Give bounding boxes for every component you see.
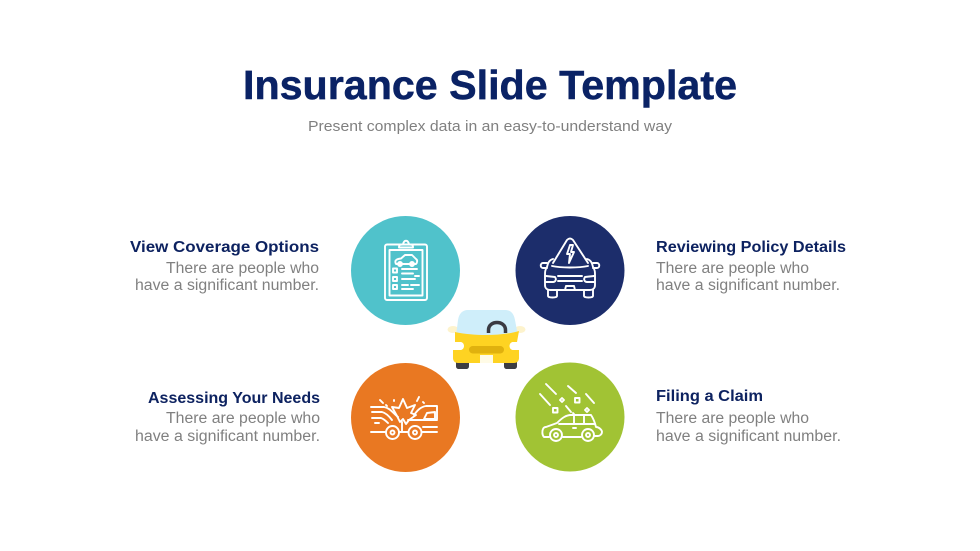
- heading: assessing your needs: Assessing Your Needs: [148, 390, 320, 407]
- panel: reviewing policy details: [656, 239, 846, 294]
- text block: assessing your needs: have a significant number.: [135, 428, 320, 445]
- icon: car crash: [371, 397, 437, 439]
- text block: reviewing policy details: There are people who: [656, 260, 809, 277]
- teal circle with clipboard icon: [351, 216, 460, 325]
- navy circle with electric car icon: [516, 216, 624, 325]
- title: Insurance Slide Template: [243, 62, 737, 108]
- text block: filing a claim: There are people who: [656, 410, 809, 427]
- orange circle with crash icon: [351, 363, 460, 472]
- text block: view coverage options: There are people who: [166, 260, 319, 277]
- text block: assessing your needs: [135, 410, 320, 445]
- panel: filing a claim: [656, 388, 841, 445]
- heading: reviewing policy details: Reviewing Policy Details: [656, 239, 846, 256]
- icon: clipboard with car: [385, 241, 427, 300]
- panel: view coverage options: [130, 239, 319, 294]
- heading: view coverage options: View Coverage Options: [130, 239, 319, 256]
- icon: car in hail: [540, 384, 602, 441]
- heading: filing a claim: Filing a Claim: [656, 388, 763, 405]
- text block: view coverage options: have a significant number.: [135, 277, 319, 294]
- icon: central yellow car: [448, 310, 526, 369]
- text block: reviewing policy details: have a significant number.: [656, 277, 840, 294]
- text block: filing a claim: have a significant number.: [656, 428, 841, 445]
- icon: electric car: [541, 238, 599, 298]
- green circle with hail car icon: [516, 362, 624, 472]
- text block: filing a claim: [656, 410, 841, 445]
- subtitle: Present complex data in an easy-to-understand way: [308, 118, 673, 135]
- panel: assessing your needs: [135, 390, 320, 445]
- text block: assessing your needs: There are people who: [166, 410, 320, 427]
- text block: reviewing policy details: [656, 260, 840, 294]
- text block: view coverage options: [135, 260, 319, 294]
